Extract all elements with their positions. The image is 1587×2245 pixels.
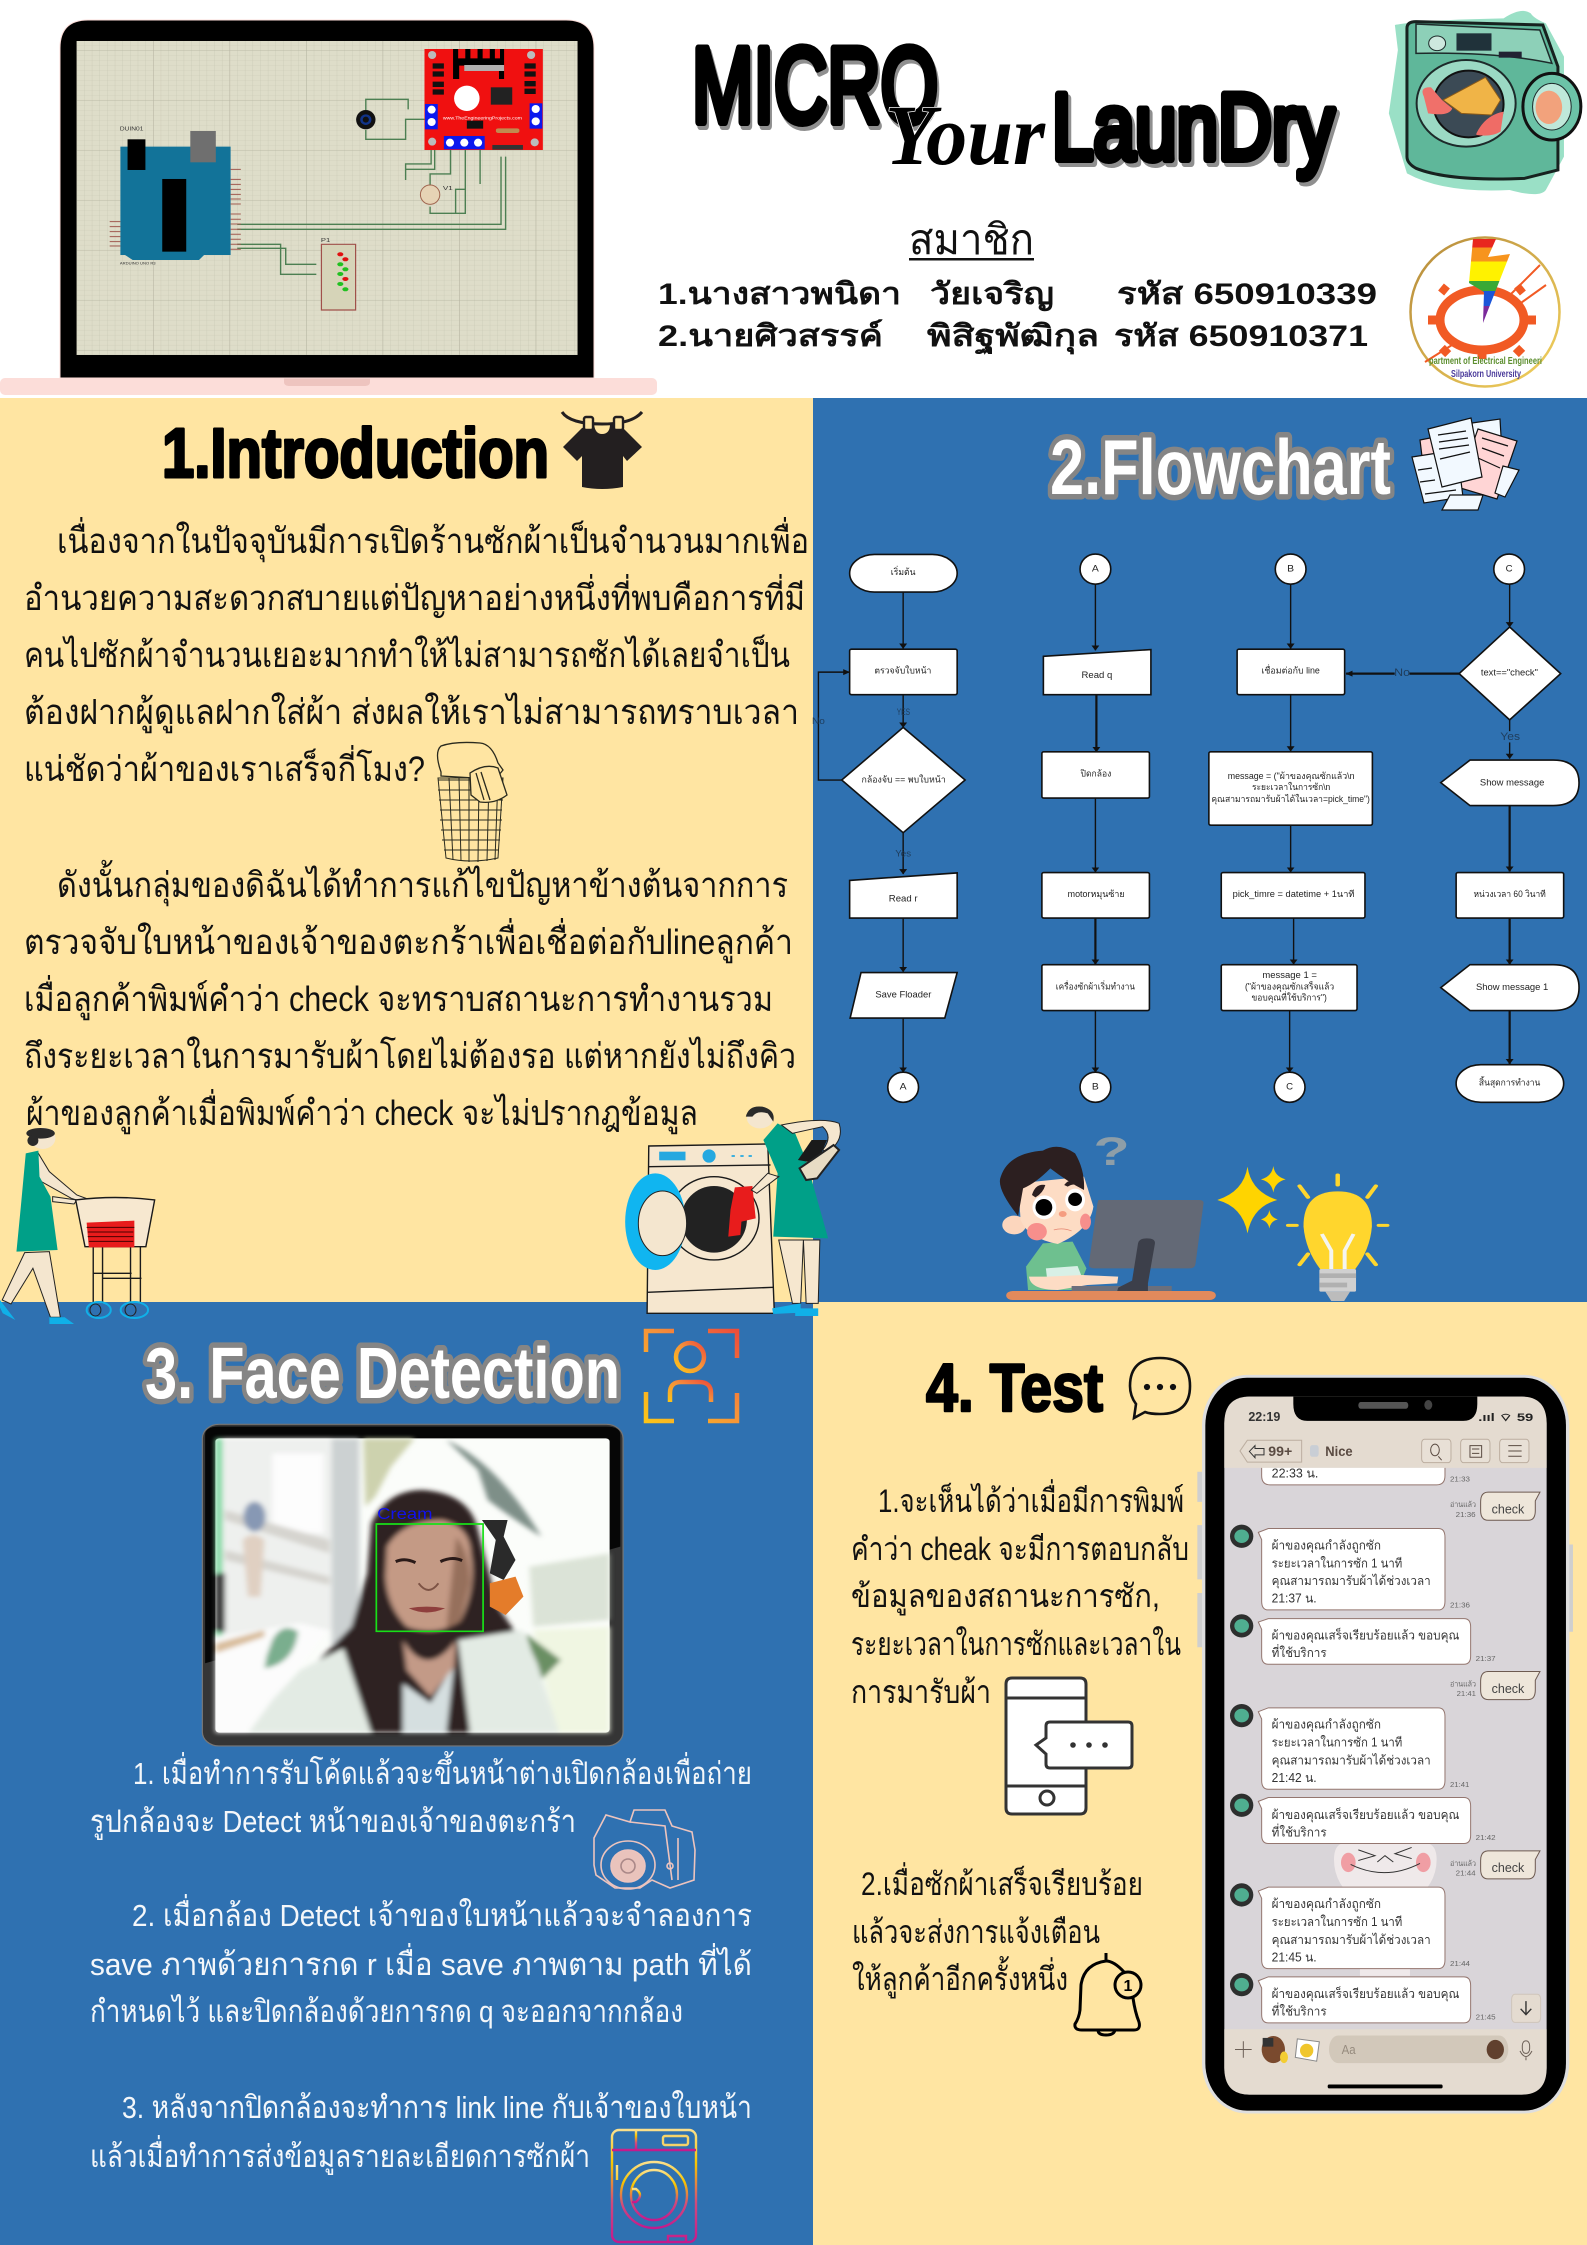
done reply: ผ้าของคุณเสร็จเรียบร้อยแล้ว ขอบคุณ: [1272, 1806, 1459, 1822]
node: read r: [850, 873, 957, 918]
illustration: boy at computer: [1000, 1129, 1387, 1301]
serial connector P1: P1: [321, 238, 331, 244]
node: connect line: [1237, 649, 1345, 695]
status reply: คุณสามารถมารับผ้าได้ช่วงเวลา: [1272, 1574, 1431, 1589]
node: message 1: ขอบคุณที่ใช้บริการ"): [1251, 991, 1327, 1003]
icon: phone with message: [1006, 1678, 1132, 1814]
flow arrows: [818, 585, 1510, 1072]
title shadow: MICRO: [694, 29, 940, 149]
done reply: [1230, 1614, 1496, 1664]
text: introduction body: อำนวยความสะดวกสบายแต่ปัญหาอย่างหนึ่งที่พบคือการที่มี: [24, 574, 805, 618]
arduino board: ARDUINO UNO R3: [120, 261, 156, 266]
member list: 1.นางสาวพนิดา: [658, 278, 901, 311]
text: face detection steps: 1. เมื่อทำการรับโค้ดแล้วจะขึ้นหน้าต่างเปิดกล้องเพื่อถ่าย: [133, 1751, 752, 1791]
node: motor left: motorหมุนซ้าย: [1068, 889, 1125, 900]
status reply: 21:42 น.: [1272, 1772, 1317, 1785]
node: connect line: เชื่อมต่อกับ line: [1261, 664, 1320, 676]
done reply: ที่ใช้บริการ: [1272, 1644, 1327, 1660]
node: connector A: A: [900, 1082, 908, 1092]
cat figure and pumpkin: [482, 1520, 516, 1580]
text: face detection steps: [90, 1751, 752, 2175]
status reply: 21:36: [1450, 1602, 1471, 1610]
text: face detection steps: แล้วเมื่อทำการส่งข้อมูลรายละเอียดการซักผ้า: [90, 2135, 590, 2175]
chat screen: [1224, 1397, 1547, 2095]
text: face detection steps: กำหนดไว้ และปิดกล้องด้วยการกด q จะออกจากกล้อง: [90, 1994, 683, 2029]
check message: อ่านแล้ว: [1450, 1680, 1477, 1689]
text: face detection steps: save ภาพด้วยการกด r เมื่อ save ภาพตาม path ที่ได้: [90, 1943, 752, 1982]
check message: 21:44: [1456, 1870, 1476, 1878]
node: message 1: ("ผ้าของคุณซักเสร็จแล้ว: [1245, 980, 1334, 992]
flowchart: [812, 554, 1579, 1102]
laptop bezel: [60, 20, 594, 378]
title LaunDry: LaunDry: [1052, 74, 1334, 179]
face bounding box: [376, 1524, 483, 1631]
icon: t-shirt on line: [562, 412, 642, 489]
text: test step 2: [852, 1862, 1143, 1999]
status reply: ระยะเวลาในการซัก 1 นาที: [1272, 1914, 1402, 1929]
member list: วัยเจริญ: [930, 278, 1054, 312]
node: save folder: Save Floader: [875, 990, 932, 1000]
text: test step 1: 1.จะเห็นได้ว่าเมื่อมีการพิมพ์: [878, 1479, 1184, 1519]
node: check decision: text=="check": [1481, 668, 1538, 678]
done reply: ผ้าของคุณเสร็จเรียบร้อยแล้ว ขอบคุณ: [1272, 1627, 1459, 1643]
icon: washing machine logo: [1389, 11, 1581, 194]
check message: [1450, 1492, 1540, 1520]
done reply: [1230, 1794, 1496, 1844]
node: start: [850, 554, 957, 592]
node: check decision: [1459, 627, 1561, 720]
laptop with circuit schematic: [0, 20, 657, 395]
serial connector P1: [321, 238, 356, 310]
status reply: คุณสามารถมารับผ้าได้ช่วงเวลา: [1272, 1932, 1431, 1947]
node: show message 1: Show message 1: [1476, 983, 1548, 993]
status reply: [1230, 1525, 1471, 1610]
node: message: คุณสามารถมารับผ้าได้ในเวลา=pick_time"): [1211, 793, 1370, 804]
node: message: [1209, 752, 1372, 825]
status reply: ผ้าของคุณกำลังถูกซัก: [1272, 1539, 1381, 1553]
icon: chat bubble: [1130, 1358, 1190, 1418]
title: [692, 25, 1337, 183]
done reply: 21:45: [1476, 2014, 1496, 2022]
node: connector B: B: [1287, 564, 1294, 574]
heading: introduction: 1.Introduction: [162, 414, 549, 492]
chat header: Nice: [1325, 1444, 1353, 1459]
label: yes: Yes: [1500, 730, 1520, 743]
lightning bolt: [1469, 239, 1510, 323]
status reply: 21:41: [1450, 1781, 1470, 1789]
check message: [1450, 1851, 1540, 1879]
status reply: [1230, 1883, 1471, 1969]
text: introduction body: [24, 517, 809, 1134]
node: connector B: [1275, 554, 1306, 584]
label: no: No: [1394, 666, 1410, 678]
icon: notification bell: 1: [1124, 1978, 1133, 1995]
text: test step 2: 2.เมื่อซักผ้าเสร็จเรียบร้อย: [861, 1862, 1143, 1902]
chat footer: Aa: [1342, 2043, 1356, 2057]
text: test step 2: แล้วจะส่งการแจ้งเตือน: [852, 1914, 1100, 1950]
chat header: 99+: [1268, 1444, 1293, 1459]
text: test step 1: ข้อมูลของสถานะการซัก,: [851, 1578, 1160, 1616]
check message: check: [1492, 1862, 1525, 1876]
question mark: ?: [1093, 1129, 1130, 1174]
title shadow: LaunDry: [1055, 78, 1337, 183]
check message: 21:41: [1457, 1690, 1477, 1699]
node: connector C: [1494, 554, 1525, 584]
arduino board: DUIN01: [120, 125, 143, 132]
node: delay 60 seconds: หน่วงเวลา 60 วินาที: [1473, 888, 1546, 900]
node: connector A: A: [1092, 564, 1100, 574]
icon: notification bell: [1075, 1953, 1141, 2035]
hair: [300, 1490, 541, 1733]
wires: [237, 99, 506, 274]
illustration: woman pushing basket: [0, 1128, 155, 1324]
node: read q: [1043, 650, 1151, 695]
chat footer: [1224, 2029, 1547, 2095]
voltage source: V1: [443, 186, 453, 192]
text: test step 1: [851, 1479, 1189, 1710]
DC motor: [356, 110, 376, 129]
node: detect face: ตรวจจับใบหน้า: [874, 665, 931, 676]
text: test step 1: คำว่า cheak จะมีการตอบกลับ: [851, 1531, 1189, 1567]
node: show message: [1441, 760, 1579, 806]
check message: อ่านแล้ว: [1450, 1500, 1477, 1510]
voltage source: [420, 185, 453, 204]
status reply: 21:37 น.: [1272, 1592, 1317, 1606]
member list: รหัส 650910371: [1114, 320, 1368, 353]
message 22:33: [1262, 1467, 1471, 1485]
face: [385, 1520, 473, 1631]
label: yes: YES: [897, 707, 910, 718]
text: introduction body: แน่ชัดว่าผ้าของเราเสร็จกี่โมง?: [24, 745, 425, 789]
text: introduction body: เนื่องจากในปัจจุบันมีการเปิดร้านซักผ้าเป็นจำนวนมากเพื่อ: [57, 517, 809, 562]
heading: test: 4. Test: [926, 1350, 1103, 1426]
chat background character: [1334, 1843, 1437, 1976]
node: washer starts: [1042, 965, 1149, 1011]
chat header: .ııl ⌔ 59: [1478, 1412, 1533, 1423]
check message: อ่านแล้ว: [1450, 1859, 1477, 1868]
heading: flowchart: 2.Flowchart: [1050, 423, 1391, 511]
chat header: 22:19: [1248, 1410, 1280, 1424]
done reply: [1230, 1973, 1496, 2023]
message 22:33: 22:33 น.: [1272, 1467, 1318, 1481]
text: face detection steps: 3. หลังจากปิดกล้องจะทำการ link line กับเจ้าของใบหน้า: [122, 2090, 752, 2125]
title shadow: [694, 29, 1337, 183]
panel: test background: [813, 1302, 1587, 2245]
text: introduction body: ตรวจจับใบหน้าของเจ้าของตะกร้าเพื่อเชื่อต่อกับlineลูกค้า: [24, 918, 793, 963]
node: start: เริ่มต้น: [891, 566, 916, 578]
phone with LINE chat: [1197, 1375, 1573, 2114]
member list: [658, 278, 1377, 356]
node: show message 1: [1441, 965, 1579, 1011]
message 22:33: 21:33: [1450, 1476, 1471, 1484]
icon: face scan: [646, 1331, 737, 1421]
panel: flowchart background: [813, 398, 1587, 1302]
phone body: [1202, 1375, 1569, 2114]
label: no: No: [812, 716, 825, 727]
status reply: ระยะเวลาในการซัก 1 นาที: [1272, 1556, 1402, 1571]
node: connector B: B: [1092, 1082, 1099, 1092]
detected name: Cream: [377, 1505, 432, 1523]
boy: [1000, 1147, 1118, 1290]
node: connector C: C: [1506, 564, 1513, 574]
status reply: ผ้าของคุณกำลังถูกซัก: [1272, 1898, 1381, 1912]
tablet with webcam photo: [202, 1424, 623, 1746]
check message: 21:36: [1456, 1511, 1476, 1519]
department name: partment of Electrical Engineeri: [1429, 356, 1542, 367]
phone side buttons: [1197, 1472, 1573, 1647]
node: end: สิ้นสุดการทำงาน: [1479, 1075, 1540, 1088]
node: pick time: pick_timre = datetime + 1นาที: [1233, 888, 1355, 900]
circuit schematic screen: [77, 41, 578, 355]
node: message: message = ("ผ้าของคุณซักแล้ว\n: [1228, 771, 1355, 781]
text: introduction body: ถึงระยะเวลาในการมารับผ้าโดยไม่ต้องรอ แต่หากยังไม่ถึงคิว: [24, 1036, 796, 1076]
status reply: ระยะเวลาในการซัก 1 นาที: [1272, 1735, 1402, 1750]
text: introduction body: ต้องฝากผู้ดูแลฝากใส่ผ้า ส่งผลให้เราไม่สามารถทราบเวลา: [24, 692, 799, 733]
panel: introduction background: [0, 398, 813, 1302]
title MICRO: MICRO: [692, 25, 938, 145]
gear and circuit: [1425, 265, 1546, 362]
L298 motor driver: www.TheEngineeringProjects.com: [442, 116, 522, 121]
text: face detection steps: รูปกล้องจะ Detect หน้าของเจ้าของตะกร้า: [90, 1804, 576, 1840]
member list: พิสิฐพัฒิกุล: [927, 320, 1099, 356]
member list: รหัส 650910339: [1117, 278, 1377, 311]
status reply: [1230, 1704, 1470, 1789]
text: introduction body: ผ้าของลูกค้าเมื่อพิมพ์คำว่า check จะไม่ปรากฎข้อมูล: [26, 1089, 698, 1134]
node: message 1: message 1 =: [1262, 970, 1317, 981]
icon: wicker laundry basket: [438, 742, 507, 862]
text: face detection steps: 2. เมื่อกล้อง Detect เจ้าของใบหน้าแล้วจะจำลองการ: [132, 1894, 752, 1933]
heading: face detection: 3. Face Detection: [145, 1334, 620, 1414]
node: read r: Read r: [889, 894, 918, 904]
desk: [1006, 1291, 1216, 1300]
status reply: 21:44: [1450, 1960, 1471, 1969]
check message: check: [1492, 1682, 1525, 1696]
scroll down button: [1512, 1994, 1541, 2022]
node: connector B: [1080, 1072, 1111, 1102]
node: pick time: [1221, 873, 1365, 918]
done reply: 21:37: [1476, 1655, 1496, 1663]
chat header: [1224, 1397, 1547, 1468]
shirt: [249, 1630, 559, 1733]
node: delay 60 seconds: [1456, 873, 1564, 918]
node: washer starts: เครื่องซักผ้าเริ่มทำงาน: [1056, 980, 1135, 992]
icon: sparkle stars: [1217, 1166, 1286, 1233]
title Your: Your: [885, 87, 1046, 183]
icon: paper documents: [1412, 418, 1519, 510]
node: connector C: [1274, 1072, 1305, 1102]
text: introduction body: ดังนั้นกลุ่มของดิฉันได้ทำการแก้ไขปัญหาข้างต้นจากการ: [57, 859, 788, 906]
done reply: ที่ใช้บริการ: [1272, 2003, 1327, 2019]
node: face decision: กล้องจับ == พบใบหน้า: [862, 774, 946, 785]
check message: [1450, 1671, 1540, 1700]
member list: 2.นายศิวสรรค์: [658, 319, 883, 353]
node: save folder: [850, 973, 957, 1018]
check message: check: [1492, 1503, 1525, 1517]
icon: washing machine outline: [612, 2130, 696, 2242]
members heading: สมาชิก: [909, 216, 1034, 263]
node: message 1: [1221, 965, 1357, 1011]
arduino board: [110, 125, 241, 266]
done reply: 21:42: [1476, 1834, 1496, 1842]
text: test step 1: การมารับผ้า: [851, 1674, 991, 1710]
icon: light bulb: [1288, 1175, 1387, 1301]
done reply: ที่ใช้บริการ: [1272, 1823, 1327, 1840]
node: connector A: [1080, 554, 1111, 584]
node: face decision: [842, 727, 965, 833]
label: yes: Yes: [895, 849, 911, 859]
icon: camera: [594, 1810, 695, 1889]
panel: face detection background: [0, 1302, 813, 2245]
done reply: ผ้าของคุณเสร็จเรียบร้อยแล้ว ขอบคุณ: [1272, 1985, 1459, 2002]
node: read q: Read q: [1082, 670, 1112, 680]
node: end: [1456, 1065, 1564, 1102]
node: motor left: [1042, 873, 1149, 918]
status reply: ผ้าของคุณกำลังถูกซัก: [1272, 1718, 1381, 1732]
node: message: ระยะเวลาในการซัก\n: [1252, 782, 1330, 793]
L298 motor driver: [424, 49, 543, 150]
status reply: 21:45 น.: [1272, 1951, 1317, 1965]
icon: department logo: [1410, 238, 1560, 386]
node: close camera: [1042, 752, 1149, 798]
text: test step 2: ให้ลูกค้าอีกครั้งหนึ่ง: [852, 1956, 1068, 1999]
text: introduction body: เมื่อลูกค้าพิมพ์คำว่า check จะทราบสถานะการทำงานรวม: [24, 975, 773, 1020]
webcam photo: [215, 1438, 610, 1733]
node: detect face: [850, 649, 957, 695]
status reply: คุณสามารถมารับผ้าได้ช่วงเวลา: [1272, 1753, 1431, 1768]
university name: Silpakorn University: [1451, 369, 1521, 380]
laptop base: [0, 378, 657, 395]
text: test step 1: ระยะเวลาในการซักและเวลาใน: [851, 1626, 1181, 1662]
node: connector C: C: [1286, 1082, 1293, 1092]
node: show message: Show message: [1480, 778, 1544, 788]
computer monitor: [1072, 1200, 1204, 1291]
node: close camera: ปิดกล้อง: [1080, 769, 1111, 779]
node: connector A: [888, 1072, 919, 1102]
illustration: woman at washing machine: [625, 1106, 840, 1316]
text: introduction body: คนไปซักผ้าจำนวนเยอะมากทำให้ไม่สามารถซักได้เลยจำเป็น: [24, 634, 790, 675]
